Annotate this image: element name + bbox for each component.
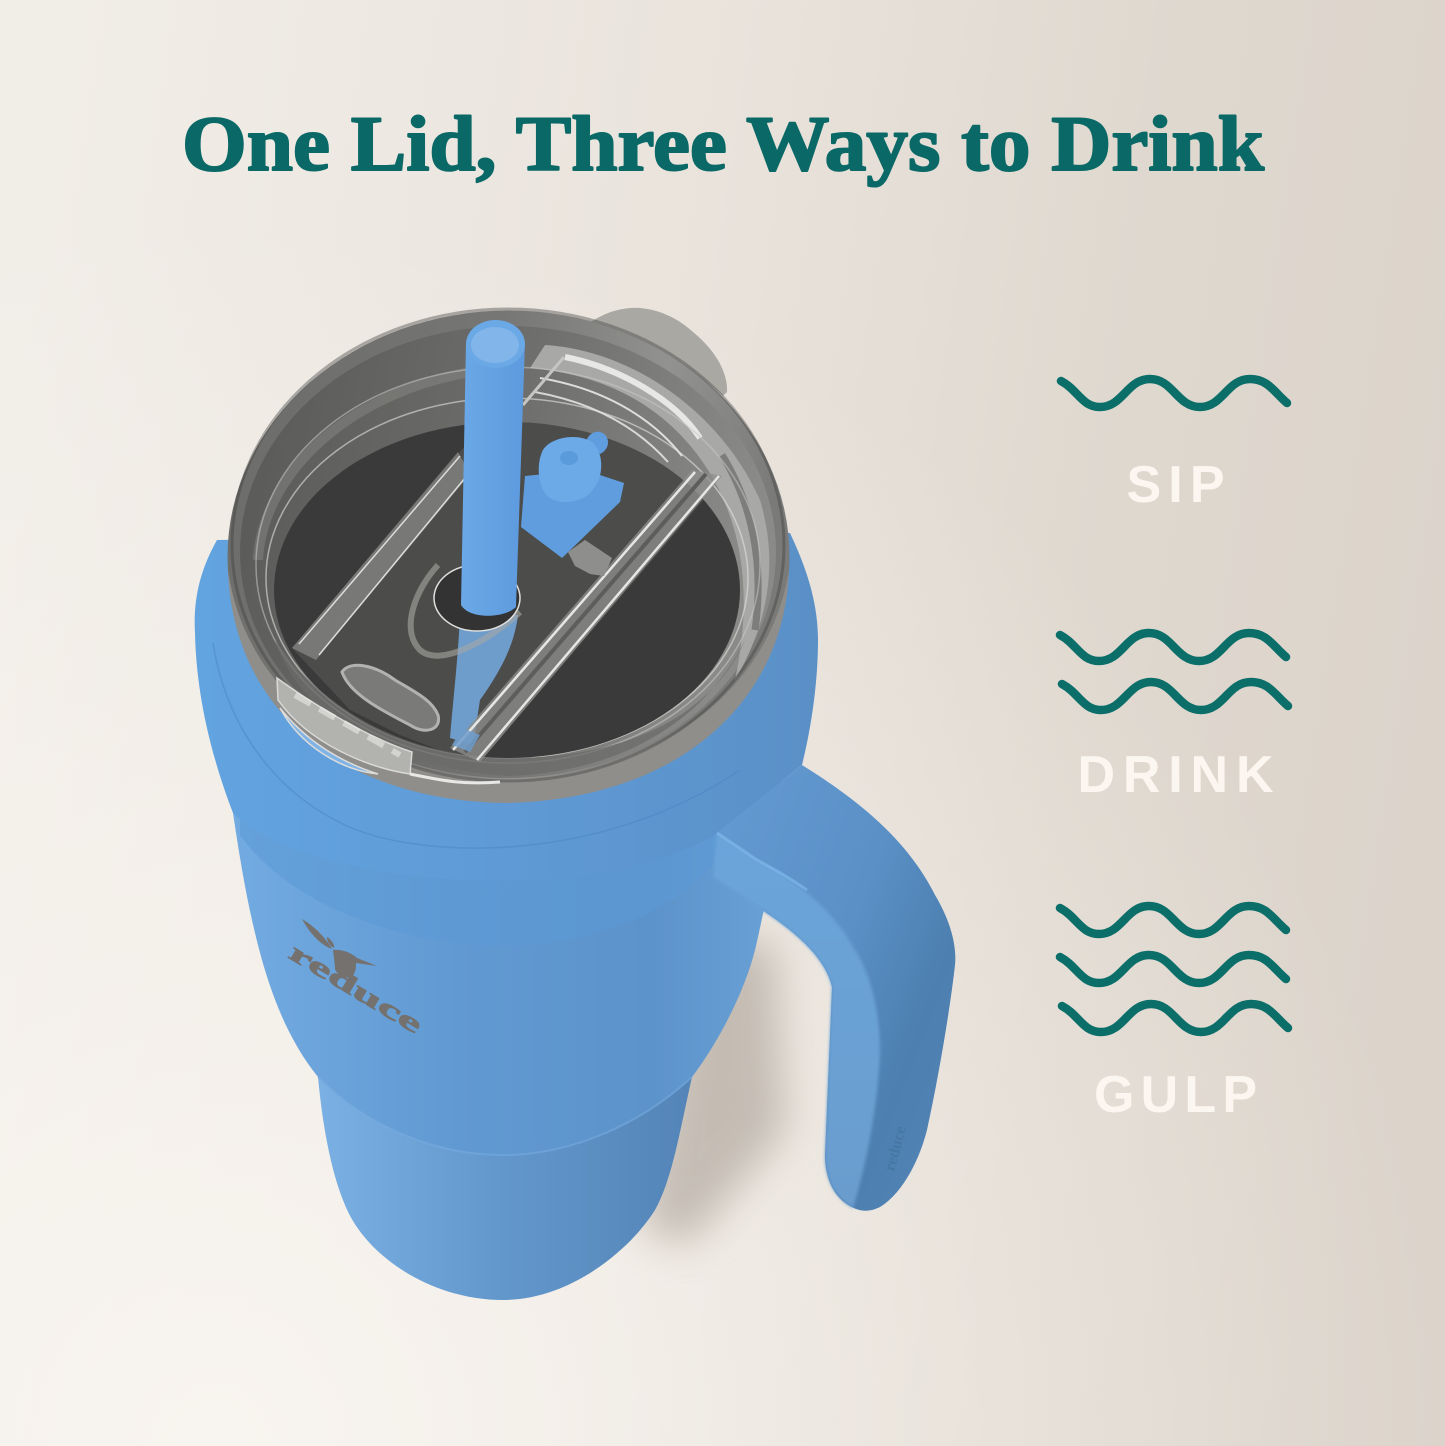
logo: reduce: reduce bbox=[284, 937, 427, 1039]
handle front face bbox=[713, 833, 880, 1208]
logo: reduce bbox=[284, 919, 427, 1039]
left ridge bbox=[292, 452, 470, 660]
lid front clip bbox=[277, 678, 500, 783]
handle bbox=[713, 765, 955, 1211]
tumbler illustration bbox=[195, 308, 955, 1300]
lid glass channel bbox=[275, 357, 745, 776]
title: One Lid, Three Ways to Drink bbox=[182, 100, 1265, 187]
lid dark interior bbox=[274, 422, 740, 758]
right ridge bbox=[450, 470, 722, 762]
lid outer rim bbox=[228, 310, 790, 802]
lid tab bbox=[588, 308, 727, 396]
glass oval around straw hole bbox=[411, 565, 520, 656]
SIP icon: one wave bbox=[1061, 379, 1287, 407]
clip bbox=[568, 540, 612, 576]
handle embossed text: reduce bbox=[881, 1124, 910, 1173]
tumbler lower body bbox=[318, 1060, 692, 1300]
tumbler collar bbox=[195, 533, 818, 881]
GULP label: GULP bbox=[1094, 1066, 1257, 1124]
stopper bbox=[521, 432, 624, 576]
GULP icon: three waves bbox=[1060, 906, 1288, 1032]
lid thumb tab bbox=[342, 665, 439, 730]
tumbler upper body bbox=[233, 780, 790, 1155]
straw bbox=[461, 320, 525, 616]
DRINK icon: two waves bbox=[1060, 633, 1288, 710]
DRINK label: DRINK bbox=[1078, 746, 1274, 804]
lower glass ledge bbox=[275, 640, 745, 776]
straw seen through lid bbox=[450, 615, 518, 745]
lid upper-right glass highlight bbox=[530, 345, 769, 680]
SIP label: SIP bbox=[1126, 456, 1224, 514]
